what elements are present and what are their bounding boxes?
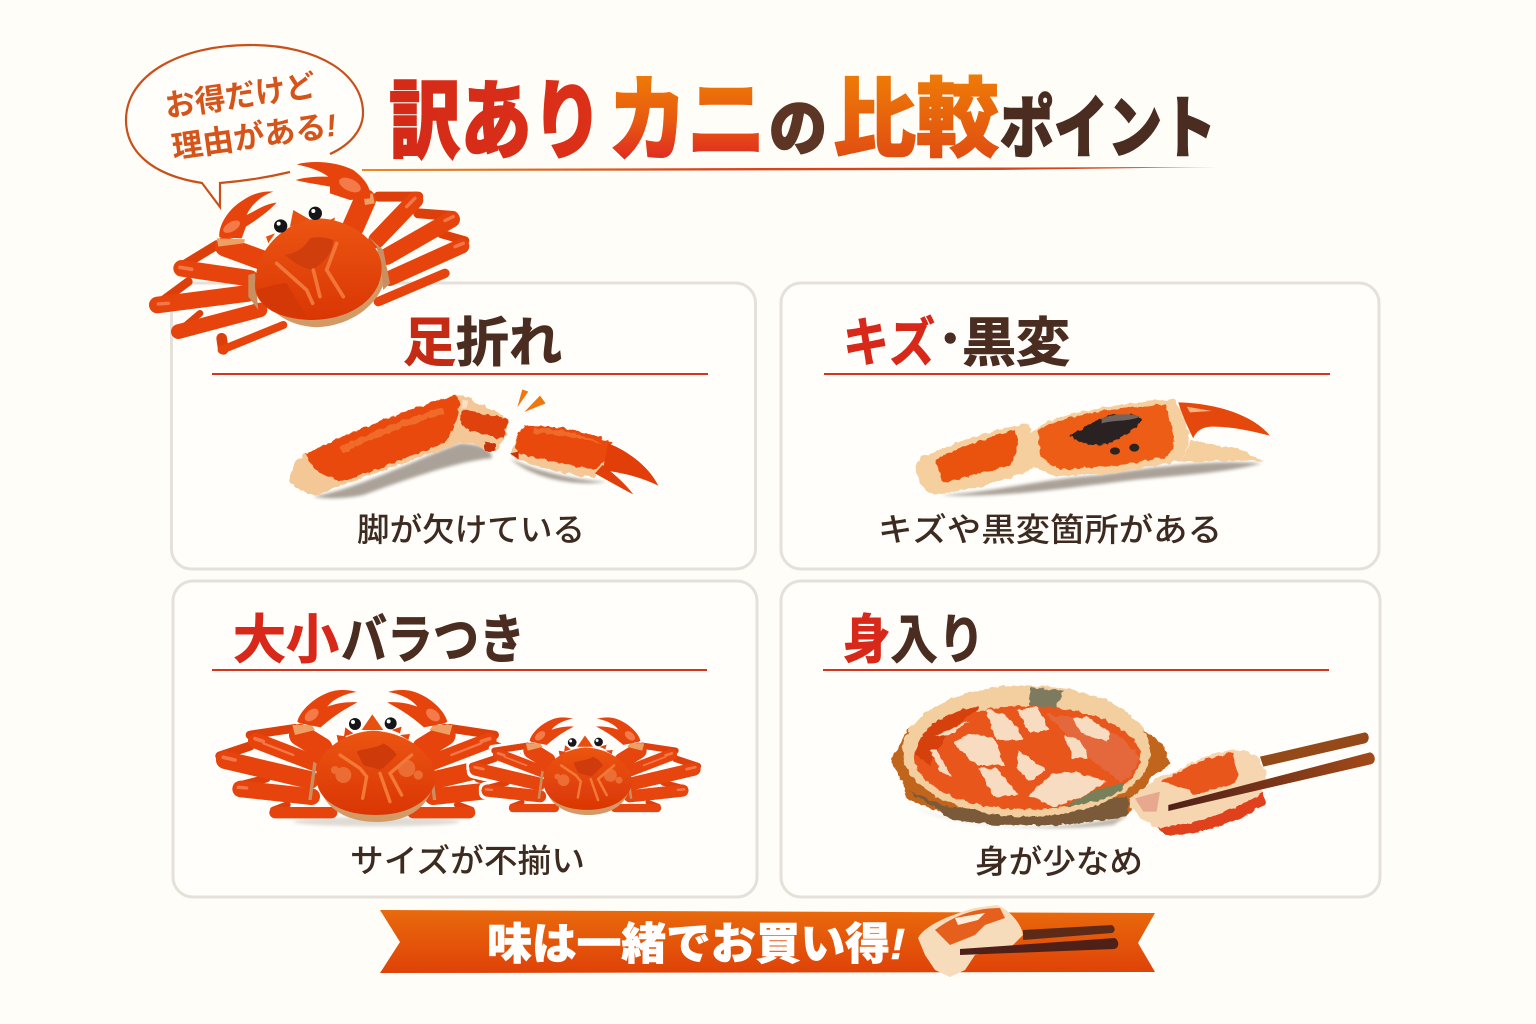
icon: crab meat on chopsticks — [918, 905, 1118, 977]
mascot crab — [157, 162, 465, 350]
title: の — [769, 95, 827, 164]
caption: キズや黒変箇所がある: キズや黒変箇所がある — [878, 512, 1222, 548]
shell outer edge — [890, 688, 1170, 822]
caption: 身が少なめ: 身が少なめ — [975, 844, 1143, 880]
picked-up meat — [1130, 750, 1267, 835]
panel: 身入り — [781, 581, 1380, 897]
caption: サイズが不揃い: サイズが不揃い — [350, 843, 585, 879]
title: 訳あり — [389, 74, 603, 170]
banner — [380, 905, 1155, 977]
heading: キズ・黒変: ･ — [937, 311, 964, 370]
heading: キズ・黒変: 黒変 — [962, 314, 1070, 373]
title: カニ — [608, 68, 766, 173]
illustration: scarred crab claw — [916, 399, 1270, 496]
chopsticks — [1260, 732, 1369, 767]
illustration: small crab — [472, 717, 698, 815]
shell rim — [903, 685, 1151, 817]
heading: キズ・黒変 — [843, 311, 1070, 373]
caption: 脚が欠けている: 脚が欠けている — [357, 512, 585, 548]
panel: 足折れ — [172, 283, 756, 569]
heading: 身入り: 身入り — [843, 611, 985, 670]
heading: 大小バラつき: バラつき — [341, 611, 525, 670]
title: 比較 — [833, 72, 999, 168]
heading: キズ・黒変: キズ — [843, 314, 935, 373]
bubble text — [163, 66, 339, 165]
heading: 足折れ: 足折れ — [403, 314, 562, 373]
title — [389, 68, 1216, 173]
bubble text: 理由がある! — [169, 108, 339, 165]
shell interior — [914, 706, 1141, 809]
banner text: 味は一緒でお買い得! — [487, 920, 905, 969]
panel: 大小バラつき — [173, 581, 757, 897]
bubble text: お得だけど — [163, 68, 318, 124]
heading: 大小バラつき: 大小 — [233, 611, 339, 670]
panel: キズ・黒変 — [781, 283, 1379, 569]
speech bubble — [126, 45, 363, 207]
illustration: big crab — [220, 690, 525, 826]
illustration: crab shell with meat and chopsticks — [890, 685, 1375, 835]
title underline — [362, 167, 1220, 171]
heading: 大小バラつき — [233, 611, 525, 670]
illustration: broken crab leg — [290, 389, 658, 498]
title: ポイント — [1000, 91, 1216, 167]
